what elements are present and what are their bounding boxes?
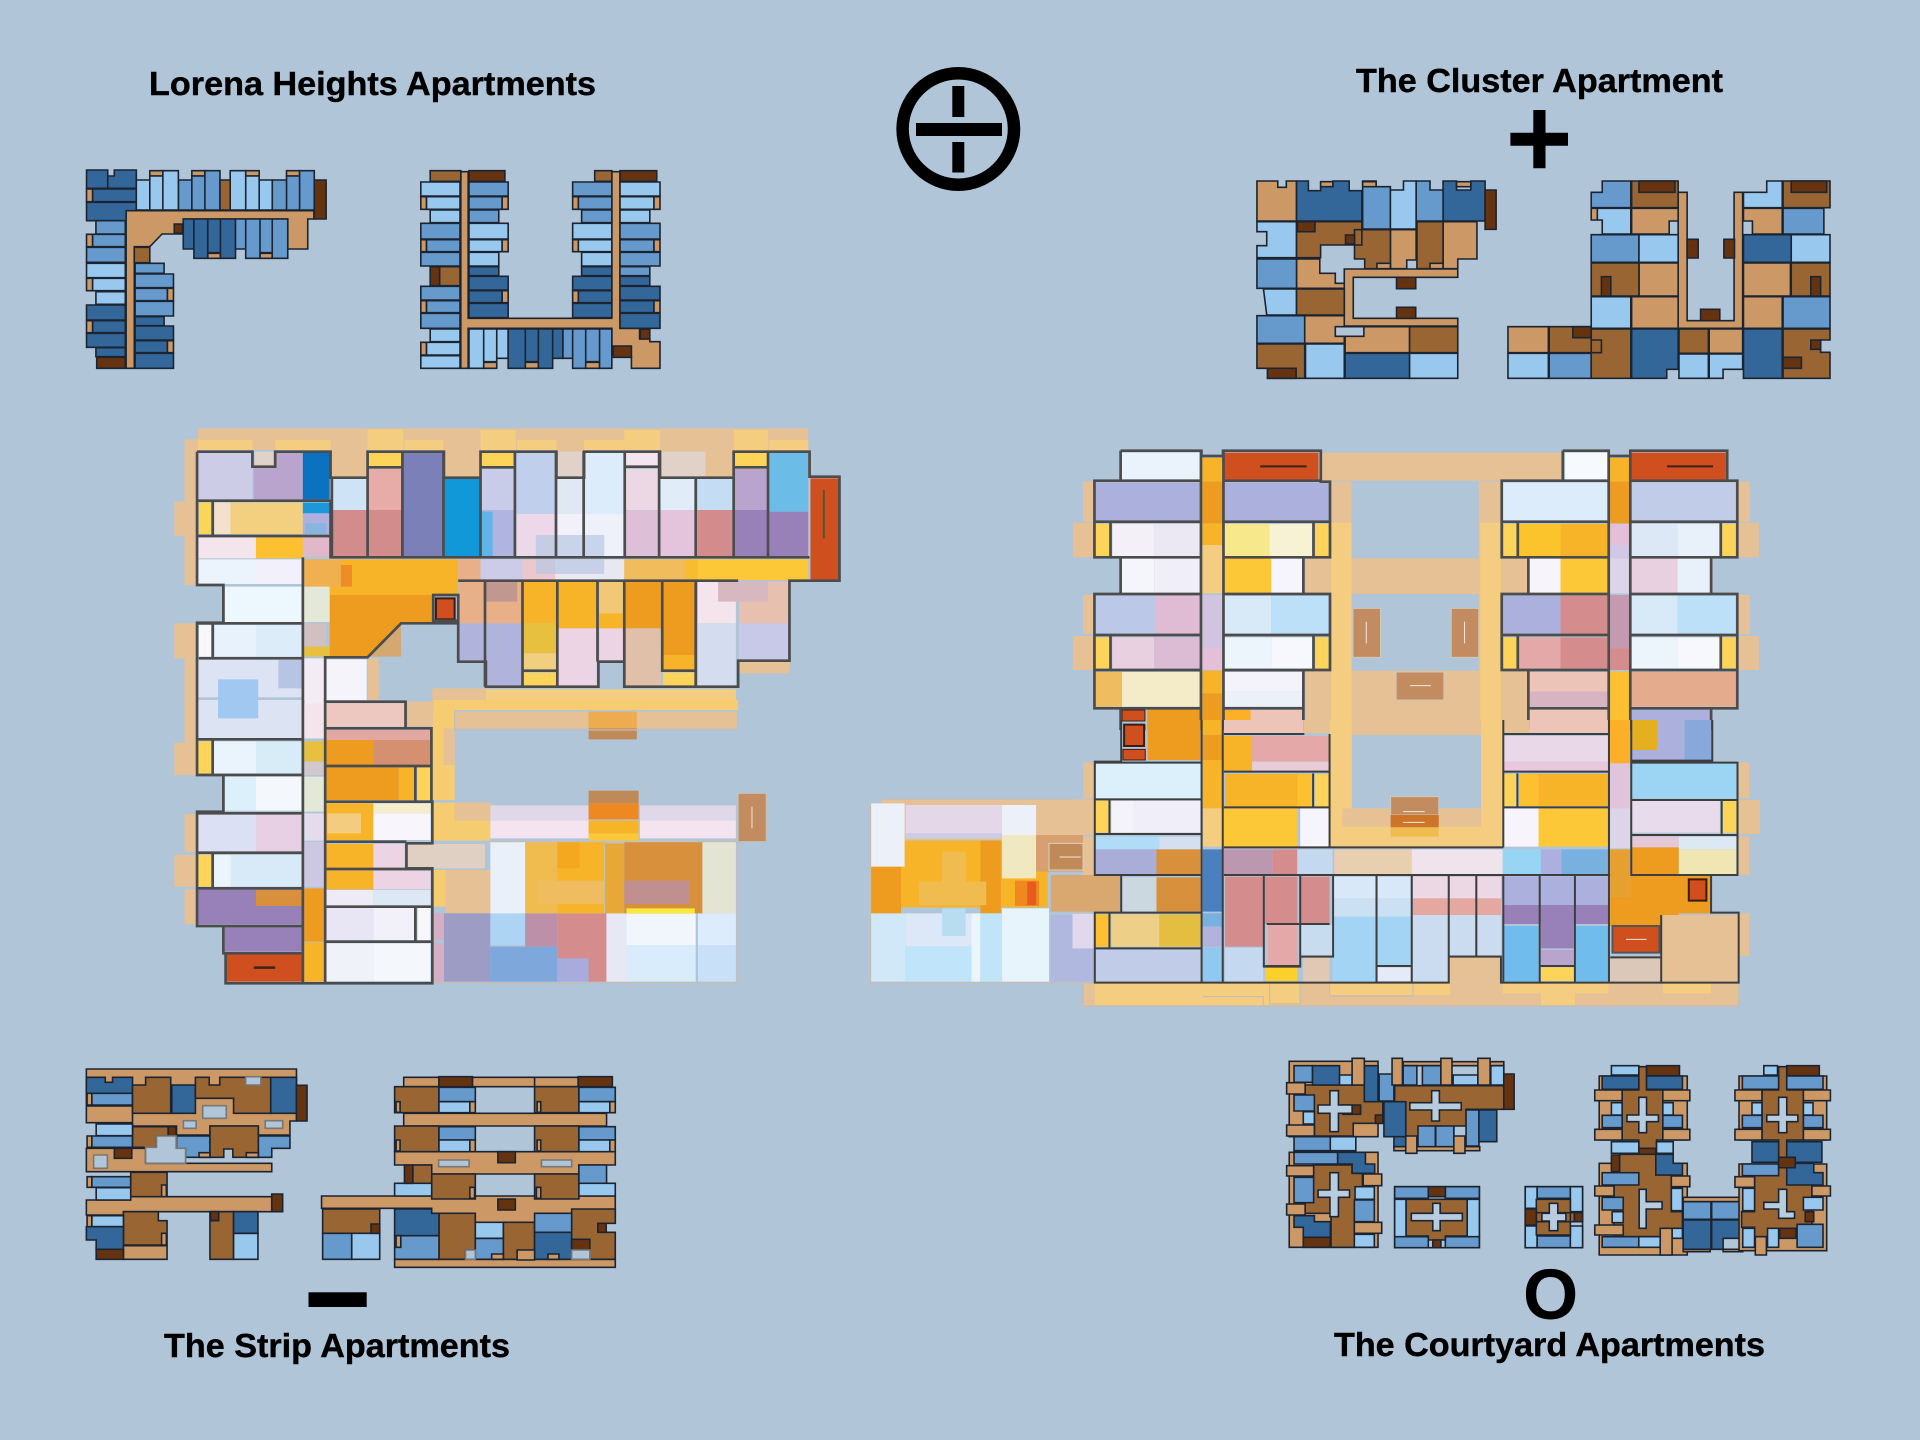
floor plan: Courtyard square 1 — [1395, 1187, 1479, 1248]
title: The Strip Apartments: The Strip Apartments — [164, 1327, 510, 1364]
icon: letter O symbol: O — [1523, 1256, 1578, 1335]
mixed lower right overlay area — [433, 913, 453, 982]
unit outlines — [1094, 451, 1737, 730]
floor plan: Courtyard square 2 — [1525, 1187, 1583, 1248]
floor plan: central large plan right lower half — [871, 720, 1760, 1006]
floor plan: Cluster right block — [1508, 181, 1830, 378]
floor plan: Courtyard U link block — [1683, 1197, 1743, 1252]
floor plan: Strip right block — [322, 1077, 615, 1267]
unit outlines — [197, 700, 432, 983]
title: The Courtyard Apartments: The Courtyard Apartments — [1334, 1326, 1765, 1363]
central corridor band — [304, 559, 458, 595]
floor plan: Courtyard U block upper right — [1735, 1066, 1830, 1162]
floor plan: central large plan left — [174, 428, 839, 743]
lower apartment row — [459, 582, 522, 623]
floor plan: Strip left block — [86, 1069, 307, 1259]
floor plan: Courtyard U block lower right — [1735, 1157, 1830, 1255]
floor plan: Cluster left block — [1257, 181, 1496, 378]
left column — [225, 587, 303, 622]
floor plan: Courtyard U block upper left — [1595, 1066, 1690, 1158]
icon: minus symbol — [308, 1292, 367, 1307]
icon: plus symbol — [1510, 110, 1568, 168]
floor plan: central large plan right upper half — [1073, 451, 1759, 730]
floor plan: Lorena Heights wing A — [87, 170, 326, 368]
extension wing — [881, 799, 1072, 840]
title: Lorena Heights Apartments: Lorena Heights Apartments — [149, 65, 596, 102]
balconies and bottom corridor — [1072, 763, 1760, 1006]
floor plan: Courtyard U block lower left — [1595, 1154, 1690, 1255]
outer tan balcony and corridor layer — [174, 428, 808, 743]
unit outlines — [197, 452, 839, 710]
icon: north symbol circle with cross — [903, 73, 1014, 185]
unit outlines — [1095, 720, 1739, 983]
floor plan: Courtyard block 3 — [1287, 1152, 1382, 1247]
floor plan: Courtyard block 1 — [1287, 1058, 1383, 1151]
floor plan: central large plan left lower half — [174, 700, 766, 983]
floor plan: Lorena Heights wing B — [421, 171, 660, 368]
floor plan: Courtyard block 2 — [1379, 1058, 1514, 1153]
title: The Cluster Apartment: The Cluster Apartment — [1356, 62, 1723, 99]
